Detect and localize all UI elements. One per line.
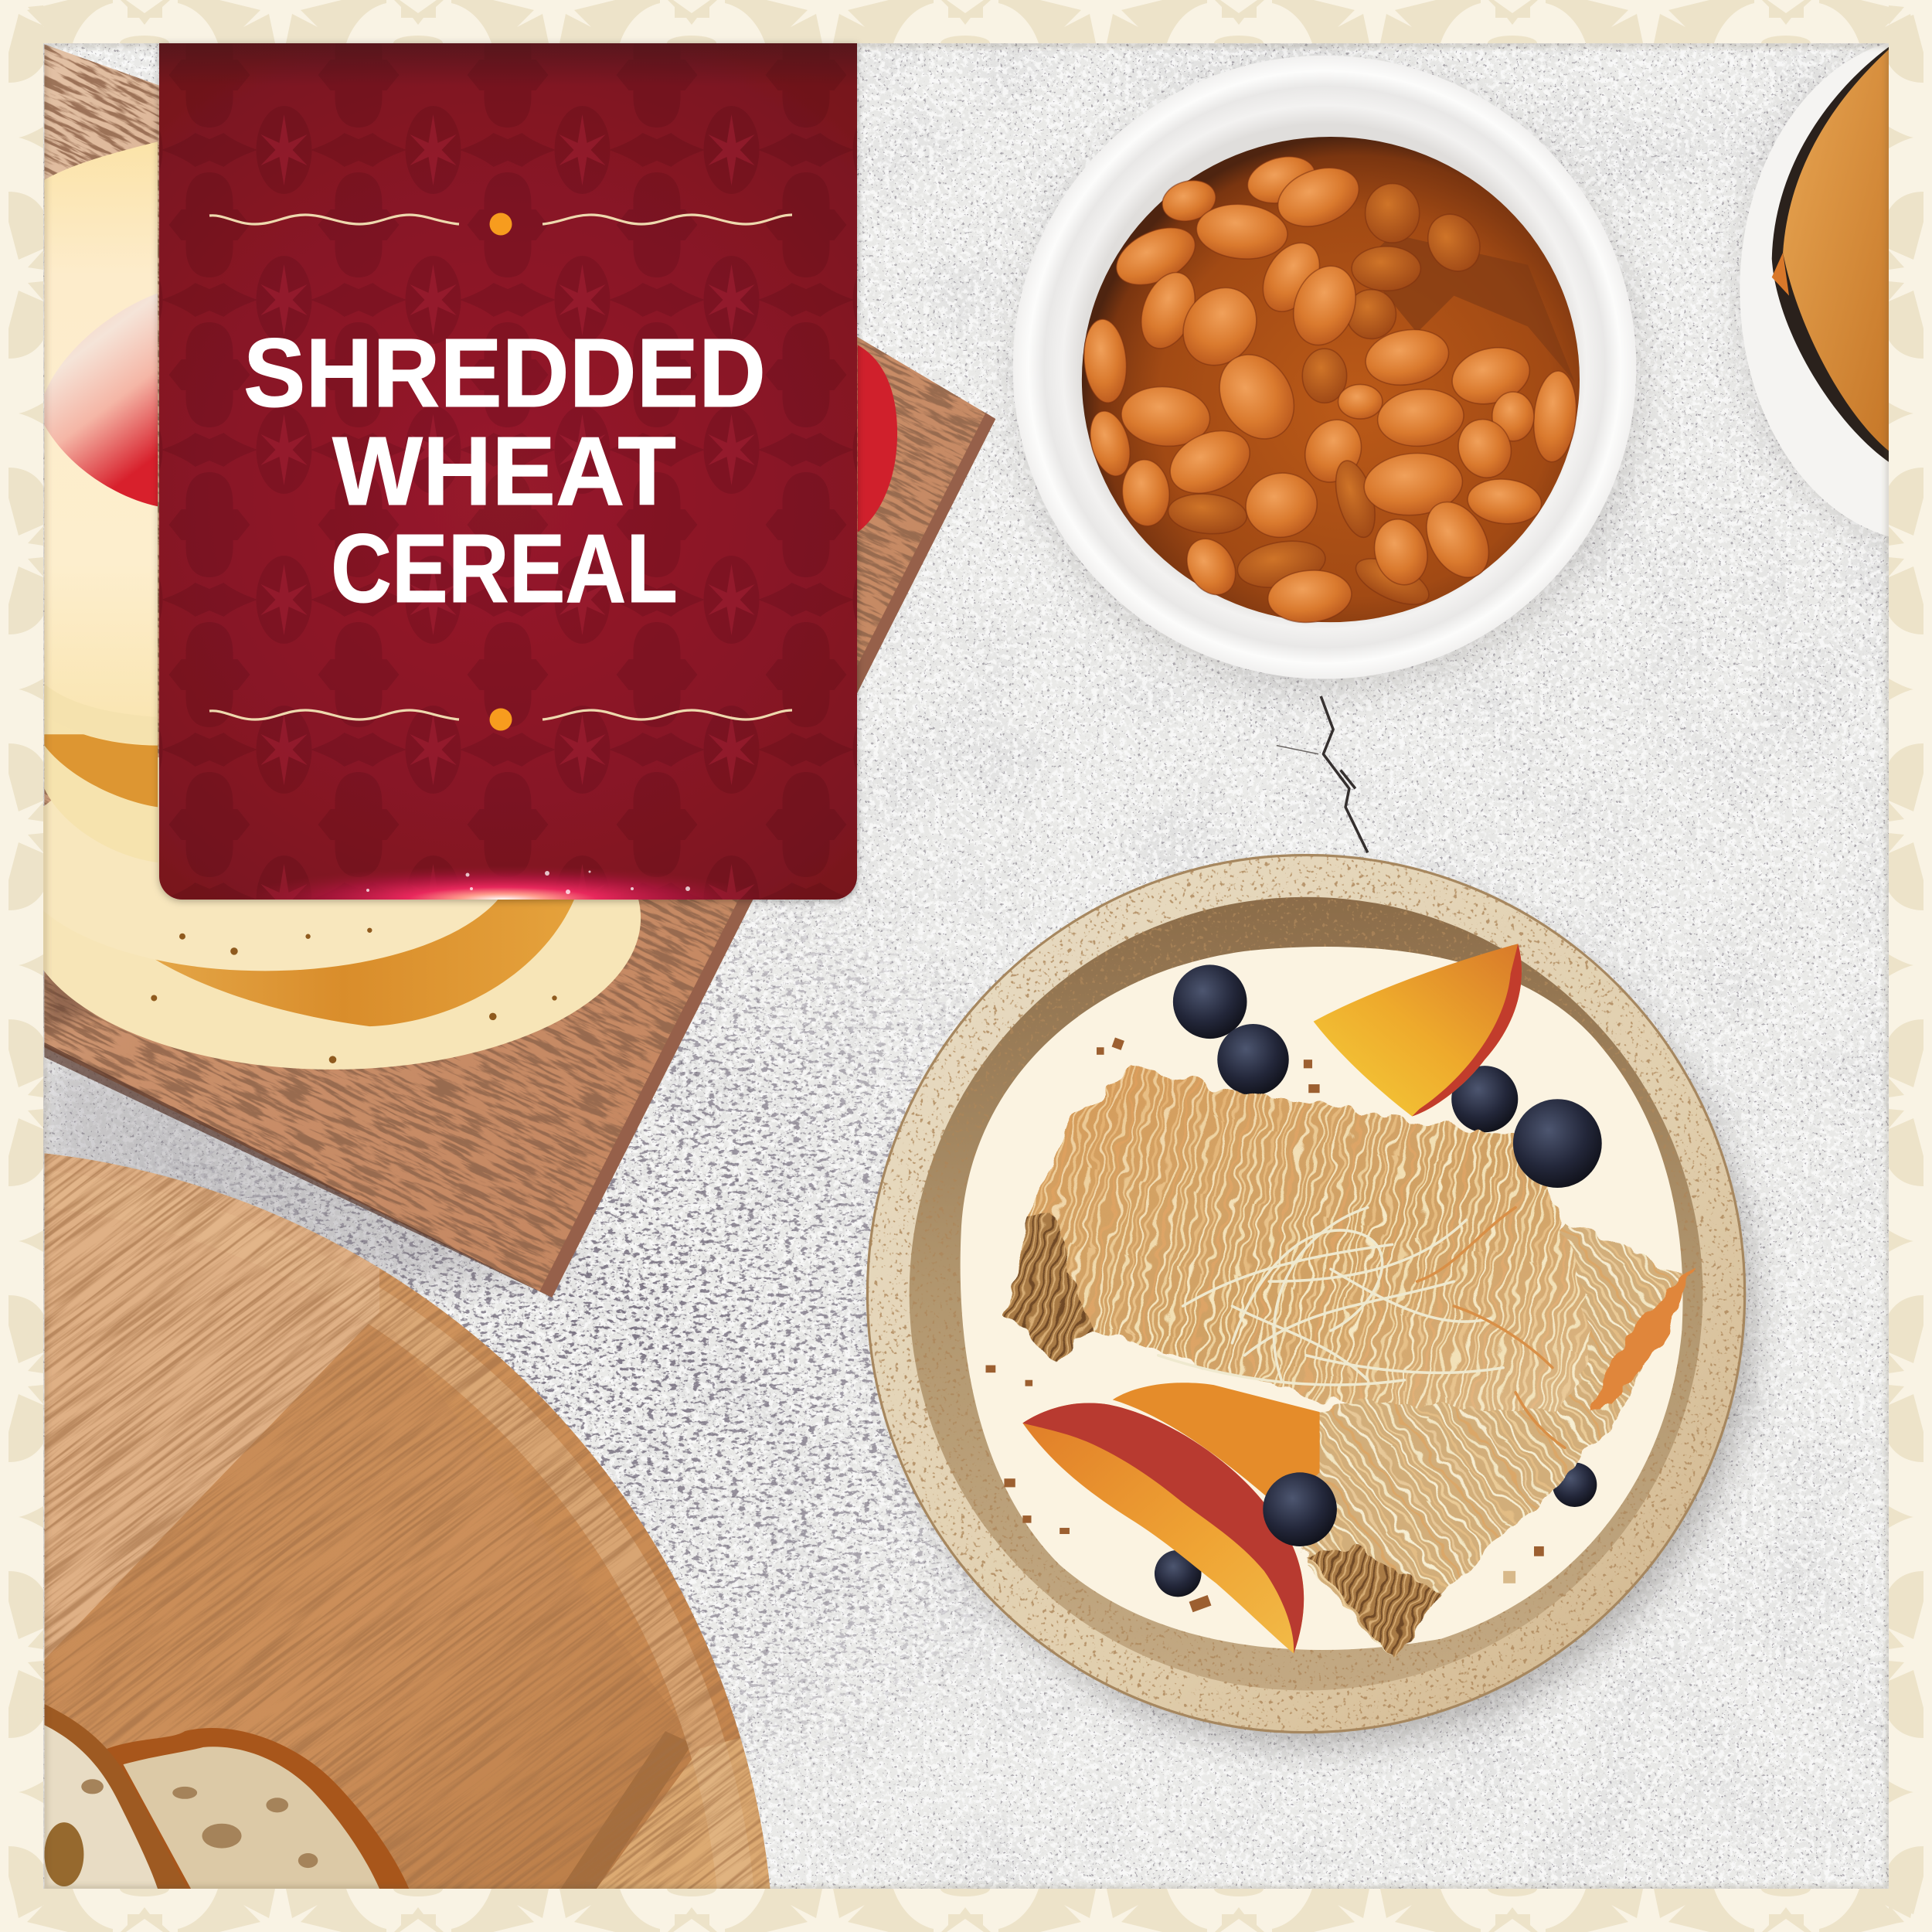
top peach slice — [1314, 944, 1522, 1117]
shredded wheat biscuit rear — [1304, 1223, 1691, 1657]
bread slices — [44, 1704, 409, 1889]
almond crumbs — [986, 1037, 1544, 1612]
round wooden board — [44, 1146, 788, 1889]
shredded wheat biscuit front — [1007, 1066, 1590, 1412]
title text: WHEAT — [332, 417, 676, 526]
title text: SHREDDED — [243, 318, 766, 427]
cereal bowl — [867, 855, 1754, 1747]
milk — [961, 947, 1683, 1650]
frame pattern: right edge — [1889, 5, 1923, 1924]
frame pattern: top edge — [12, 0, 1917, 43]
cutting board with pancakes — [15, 44, 995, 1298]
upper ornament — [209, 213, 792, 235]
strawberry slice — [44, 293, 158, 506]
front blueberry — [1263, 1472, 1337, 1546]
pancake stack — [15, 141, 641, 1070]
loose noodle strands — [1158, 1208, 1503, 1385]
glow at panel base — [240, 866, 765, 934]
blueberries — [1155, 964, 1597, 1597]
panel: title card — [159, 43, 857, 934]
strawberry behind panel — [858, 345, 897, 532]
title text — [243, 318, 766, 623]
frame pattern: left edge — [9, 5, 43, 1924]
baked beans bowl — [1013, 56, 1642, 692]
muffin bowl cropped at right — [1740, 37, 1932, 543]
lower peach slices — [1113, 1383, 1320, 1509]
title text: CEREAL — [331, 514, 678, 623]
lower ornament — [209, 708, 792, 731]
beans — [1080, 150, 1580, 626]
right blueberry over biscuit — [1513, 1099, 1602, 1188]
frame pattern: bottom edge — [12, 1889, 1917, 1932]
